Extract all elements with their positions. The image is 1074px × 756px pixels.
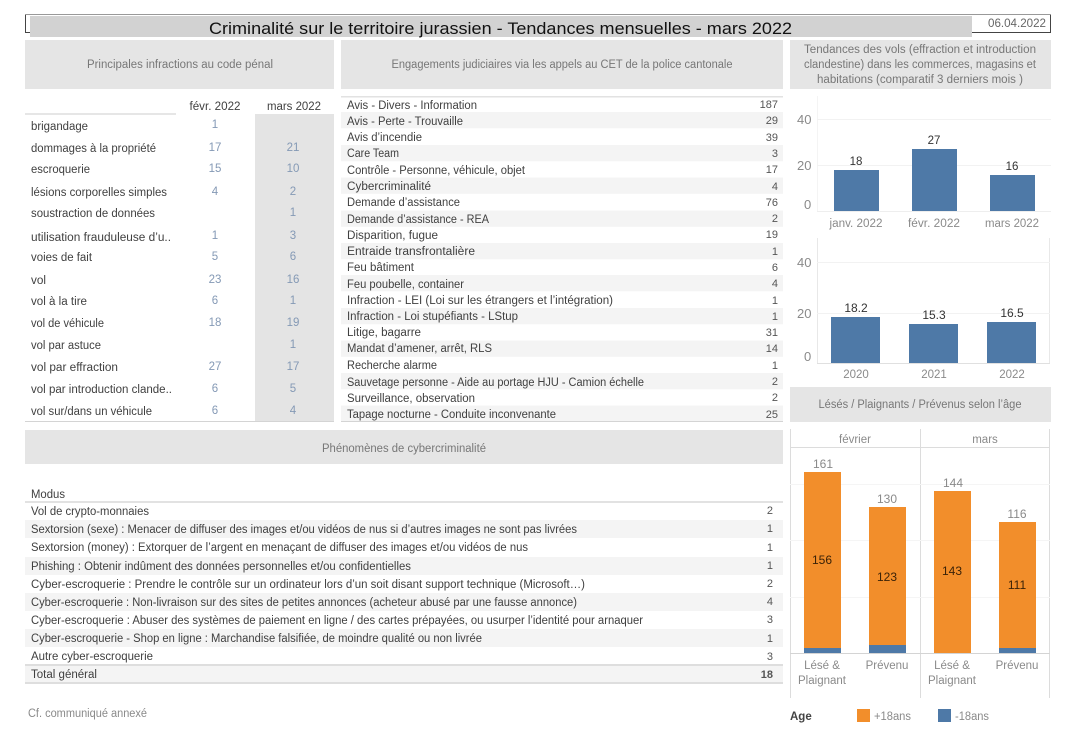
table: infractions: 17 (209, 142, 221, 154)
heading: lésés plaignants prévenus: Lésés / Plaignants / Prévenus selon l’âge (818, 399, 1022, 411)
table: infractions: 5 (212, 251, 218, 263)
bar chart: vols par année: 20 (797, 306, 811, 321)
bar chart: vols par année: 18.2 (844, 301, 868, 315)
table: engagements: 76 (766, 197, 778, 209)
legend: âge: -18ans (955, 711, 989, 723)
table: infractions: 19 (287, 317, 299, 329)
table: infractions: 1 (212, 119, 218, 131)
legend: âge (790, 709, 989, 723)
panel: principales infractions (25, 40, 334, 422)
table: infractions: 18 (209, 317, 221, 329)
table: infractions: vol par astuce (31, 340, 101, 352)
table: engagements (341, 96, 783, 422)
table: infractions: vol par effraction (31, 362, 118, 374)
table: infractions: 4 (212, 186, 219, 198)
table: infractions: voies de fait (31, 252, 93, 264)
table: infractions (25, 101, 334, 422)
bar chart: vols 3 derniers mois: févr. 2022 (908, 218, 960, 230)
table: engagements: Care Team (347, 148, 399, 160)
table: engagements: Disparition, fugue (347, 230, 438, 242)
bar chart: vols 3 derniers mois: 0 (804, 197, 811, 212)
heading: tendances des vols: habitations (comparatif 3 derniers mois ) (817, 74, 1023, 86)
table: infractions: 10 (287, 163, 299, 175)
table: modus: 1 (767, 560, 773, 572)
table: infractions: 6 (212, 383, 218, 395)
table: engagements: 19 (766, 229, 778, 241)
bar chart: vols 3 derniers mois: 40 (797, 112, 811, 127)
table: infractions: 6 (290, 251, 296, 263)
heading: cybercriminalité: Phénomènes de cybercriminalité (322, 443, 486, 455)
stacked bar chart: âge: Plaignant (928, 675, 977, 687)
table: modus: 1 (767, 542, 773, 554)
table: modus: Total général (31, 669, 97, 681)
table: engagements: 1 (772, 246, 778, 258)
table: infractions: vol sur/dans un véhicule (31, 406, 152, 418)
table: engagements: Demande d’assistance (347, 197, 460, 209)
table: modus: 18 (761, 669, 773, 681)
table: infractions: 27 (209, 361, 221, 373)
heading: principales infractions: Principales infractions au code pénal (87, 59, 273, 71)
table: engagements: 3 (772, 148, 778, 160)
bar chart: vols 3 derniers mois: janv. 2022 (828, 218, 882, 230)
table: modus: Phishing : Obtenir indûment des données personnelles et/ou confidentielles (31, 561, 411, 573)
table: infractions: 21 (287, 142, 299, 154)
bar chart: vols par année: 15.3 (922, 308, 946, 322)
bar chart: vols par année (797, 238, 1050, 381)
table: engagements: Recherche alarme (347, 360, 437, 372)
table: engagements: 187 (760, 99, 778, 111)
stacked bar chart: âge: 111 (1008, 578, 1026, 592)
table: engagements: Surveillance, observation (347, 393, 475, 405)
table: engagements: 39 (766, 132, 778, 144)
table: infractions: vol (31, 275, 46, 287)
table: engagements: Avis - Perte - Trouvaille (347, 116, 463, 128)
stacked bar chart: âge: Prévenu (996, 660, 1038, 672)
date: 06.04.2022 (988, 18, 1046, 30)
heading: tendances des vols (790, 40, 1051, 89)
table: modus: 1 (767, 523, 773, 535)
bar chart: vols par année: 2021 (921, 369, 947, 381)
stacked bar chart: âge: Lésé & (934, 660, 970, 672)
table: infractions: 23 (209, 274, 221, 286)
table: modus: 3 (767, 614, 773, 626)
bar chart: vols par année: 16.5 (1000, 306, 1024, 320)
table: infractions: brigandage (31, 121, 88, 133)
panel: engagements judiciaires (341, 40, 783, 422)
stacked bar chart: âge (790, 429, 1050, 698)
table: engagements: Cybercriminalité (347, 181, 431, 193)
bar chart: vols 3 derniers mois: mars 2022 (985, 218, 1039, 230)
table: infractions: soustraction de données (31, 208, 155, 220)
table: engagements: Avis d’incendie (347, 132, 422, 144)
table: infractions: utilisation frauduleuse d’u.. (31, 232, 171, 244)
table: engagements: Avis - Divers - Information (347, 100, 477, 112)
stacked bar chart: âge: 143 (942, 564, 962, 578)
bar chart: vols 3 derniers mois: 20 (797, 158, 811, 173)
table: infractions: lésions corporelles simples (31, 187, 167, 199)
table: engagements: Sauvetage personne - Aide au portage HJU - Camion échelle (347, 377, 644, 389)
table: modus: 2 (767, 505, 773, 517)
table: engagements: 6 (772, 262, 778, 274)
table: infractions: 6 (212, 295, 218, 307)
bar chart: vols par année: 2020 (843, 369, 869, 381)
table: infractions: vol par introduction clande.. (31, 384, 172, 396)
stacked bar chart: âge: 144 (943, 476, 963, 490)
table: modus: Modus (31, 489, 65, 501)
table: infractions: vol de véhicule (31, 318, 104, 330)
heading: engagements judiciaires: Engagements judiciaires via les appels au CET de la police cantonale (392, 59, 732, 71)
legend: âge: Age (790, 711, 812, 723)
table: modus: Cyber-escroquerie : Non-livraison sur des sites de petites annonces (acheteur abusé par une fausse annonce) (31, 597, 577, 609)
table: modus: 1 (767, 633, 773, 645)
table: engagements: Contrôle - Personne, véhicule, objet (347, 165, 526, 177)
table: engagements: Feu poubelle, container (347, 279, 464, 291)
table: engagements: 4 (772, 181, 778, 193)
table: modus: Cyber-escroquerie - Shop en ligne : Marchandise falsifiée, de moindre qualité ou non livrée (31, 633, 482, 645)
bar chart: vols 3 derniers mois (797, 96, 1051, 230)
table: modus: 4 (767, 596, 773, 608)
table: engagements: Demande d’assistance - REA (347, 214, 489, 226)
table: infractions: 4 (290, 405, 297, 417)
table: engagements: 29 (766, 115, 778, 127)
table: modus: 3 (767, 651, 773, 663)
table: engagements: Infraction - LEI (Loi sur les étrangers et l’intégration) (347, 295, 613, 307)
table: modus: Autre cyber-escroquerie (31, 651, 153, 663)
table: engagements: 1 (772, 360, 778, 372)
table: engagements: Tapage nocturne - Conduite inconvenante (347, 409, 556, 421)
stacked bar chart: âge: Prévenu (866, 660, 908, 672)
table: modus: Sextorsion (sexe) : Menacer de diffuser des images et/ou vidéos de nus si d’autres images ne sont pas livrées (31, 524, 577, 536)
table: infractions: dommages à la propriété (31, 143, 156, 155)
table: engagements: 1 (772, 311, 778, 323)
bar chart: vols 3 derniers mois: 18 (850, 156, 862, 168)
table: modus (25, 489, 783, 684)
bar chart: vols par année: 0 (804, 349, 811, 364)
table: engagements: 1 (772, 295, 778, 307)
bar chart: vols par année: 40 (797, 255, 811, 270)
table: engagements: 2 (772, 392, 778, 404)
bar chart: vols 3 derniers mois: 16 (1006, 161, 1018, 173)
table: infractions: févr. 2022 (190, 101, 240, 113)
footnote: Cf. communiqué annexé (28, 708, 147, 720)
table: engagements: Feu bâtiment (347, 262, 415, 274)
table: engagements: 31 (766, 327, 778, 339)
table: modus: Sextorsion (money) : Extorquer de l’argent en menaçant de diffuser des images et/ou vidéos de nus (31, 542, 528, 554)
table: modus: Cyber-escroquerie : Abuser des systèmes de paiement en ligne / des cartes prépayées, ou usurper l’identité pour arnaquer (31, 615, 643, 627)
table: infractions: 6 (212, 405, 218, 417)
table: infractions: 1 (290, 207, 296, 219)
table: engagements: 17 (766, 164, 778, 176)
table: infractions: 1 (290, 339, 296, 351)
table: infractions: 2 (290, 186, 296, 198)
bar chart: vols 3 derniers mois: 27 (928, 135, 940, 147)
stacked bar chart: âge: Plaignant (798, 675, 847, 687)
table: infractions: 1 (290, 295, 296, 307)
table: engagements: 25 (766, 409, 778, 421)
table: infractions: escroquerie (31, 164, 90, 176)
stacked bar chart: âge: 156 (812, 553, 832, 567)
stacked bar chart: âge: 116 (1007, 507, 1027, 521)
table: engagements: Mandat d’amener, arrêt, RLS (347, 343, 492, 355)
table: infractions: 17 (287, 361, 299, 373)
table: modus: Vol de crypto-monnaies (31, 506, 149, 518)
stacked bar chart: âge: 161 (813, 457, 833, 471)
heading: principales infractions (25, 40, 334, 89)
legend: âge: +18ans (874, 711, 911, 723)
heading: tendances des vols: Tendances des vols (effraction et introduction (804, 44, 1036, 56)
heading: engagements judiciaires (341, 40, 783, 89)
table: infractions: 16 (287, 274, 299, 286)
table: engagements: Entraide transfrontalière (347, 246, 475, 258)
table: infractions: mars 2022 (267, 101, 321, 113)
stacked bar chart: âge: février (839, 434, 871, 446)
stacked bar chart: âge: 123 (877, 570, 897, 584)
table: engagements: 2 (772, 376, 778, 388)
title bar: Criminalité sur le territoire jurassien - Tendances mensuelles - mars 2022 (209, 19, 792, 38)
table: engagements: Litige, bagarre (347, 327, 421, 339)
bar chart: vols par année: 2022 (999, 369, 1025, 381)
table: engagements: 14 (766, 343, 778, 355)
panel: phénomènes de cybercriminalité (25, 430, 783, 684)
table: engagements: Infraction - Loi stupéfiants - LStup (347, 311, 518, 323)
table: infractions: 5 (290, 383, 296, 395)
table: modus: 2 (767, 578, 773, 590)
heading: lésés plaignants prévenus (790, 387, 1051, 422)
table: modus: Cyber-escroquerie : Prendre le contrôle sur un ordinateur lors d’un soit disant support technique (Microsoft…) (31, 579, 585, 591)
heading: cybercriminalité (25, 430, 783, 464)
table: engagements: 4 (772, 278, 778, 290)
table: infractions: 1 (212, 230, 218, 242)
heading: tendances des vols: clandestine) dans les commerces, magasins et (804, 59, 1037, 71)
stacked bar chart: âge: mars (972, 434, 998, 446)
table: infractions: 15 (209, 163, 221, 175)
table: engagements: 2 (772, 213, 778, 225)
title bar (25, 14, 1051, 38)
table: infractions: 3 (290, 230, 296, 242)
stacked bar chart: âge: 130 (877, 492, 897, 506)
table: infractions: vol à la tire (31, 296, 87, 308)
stacked bar chart: âge: Lésé & (804, 660, 840, 672)
